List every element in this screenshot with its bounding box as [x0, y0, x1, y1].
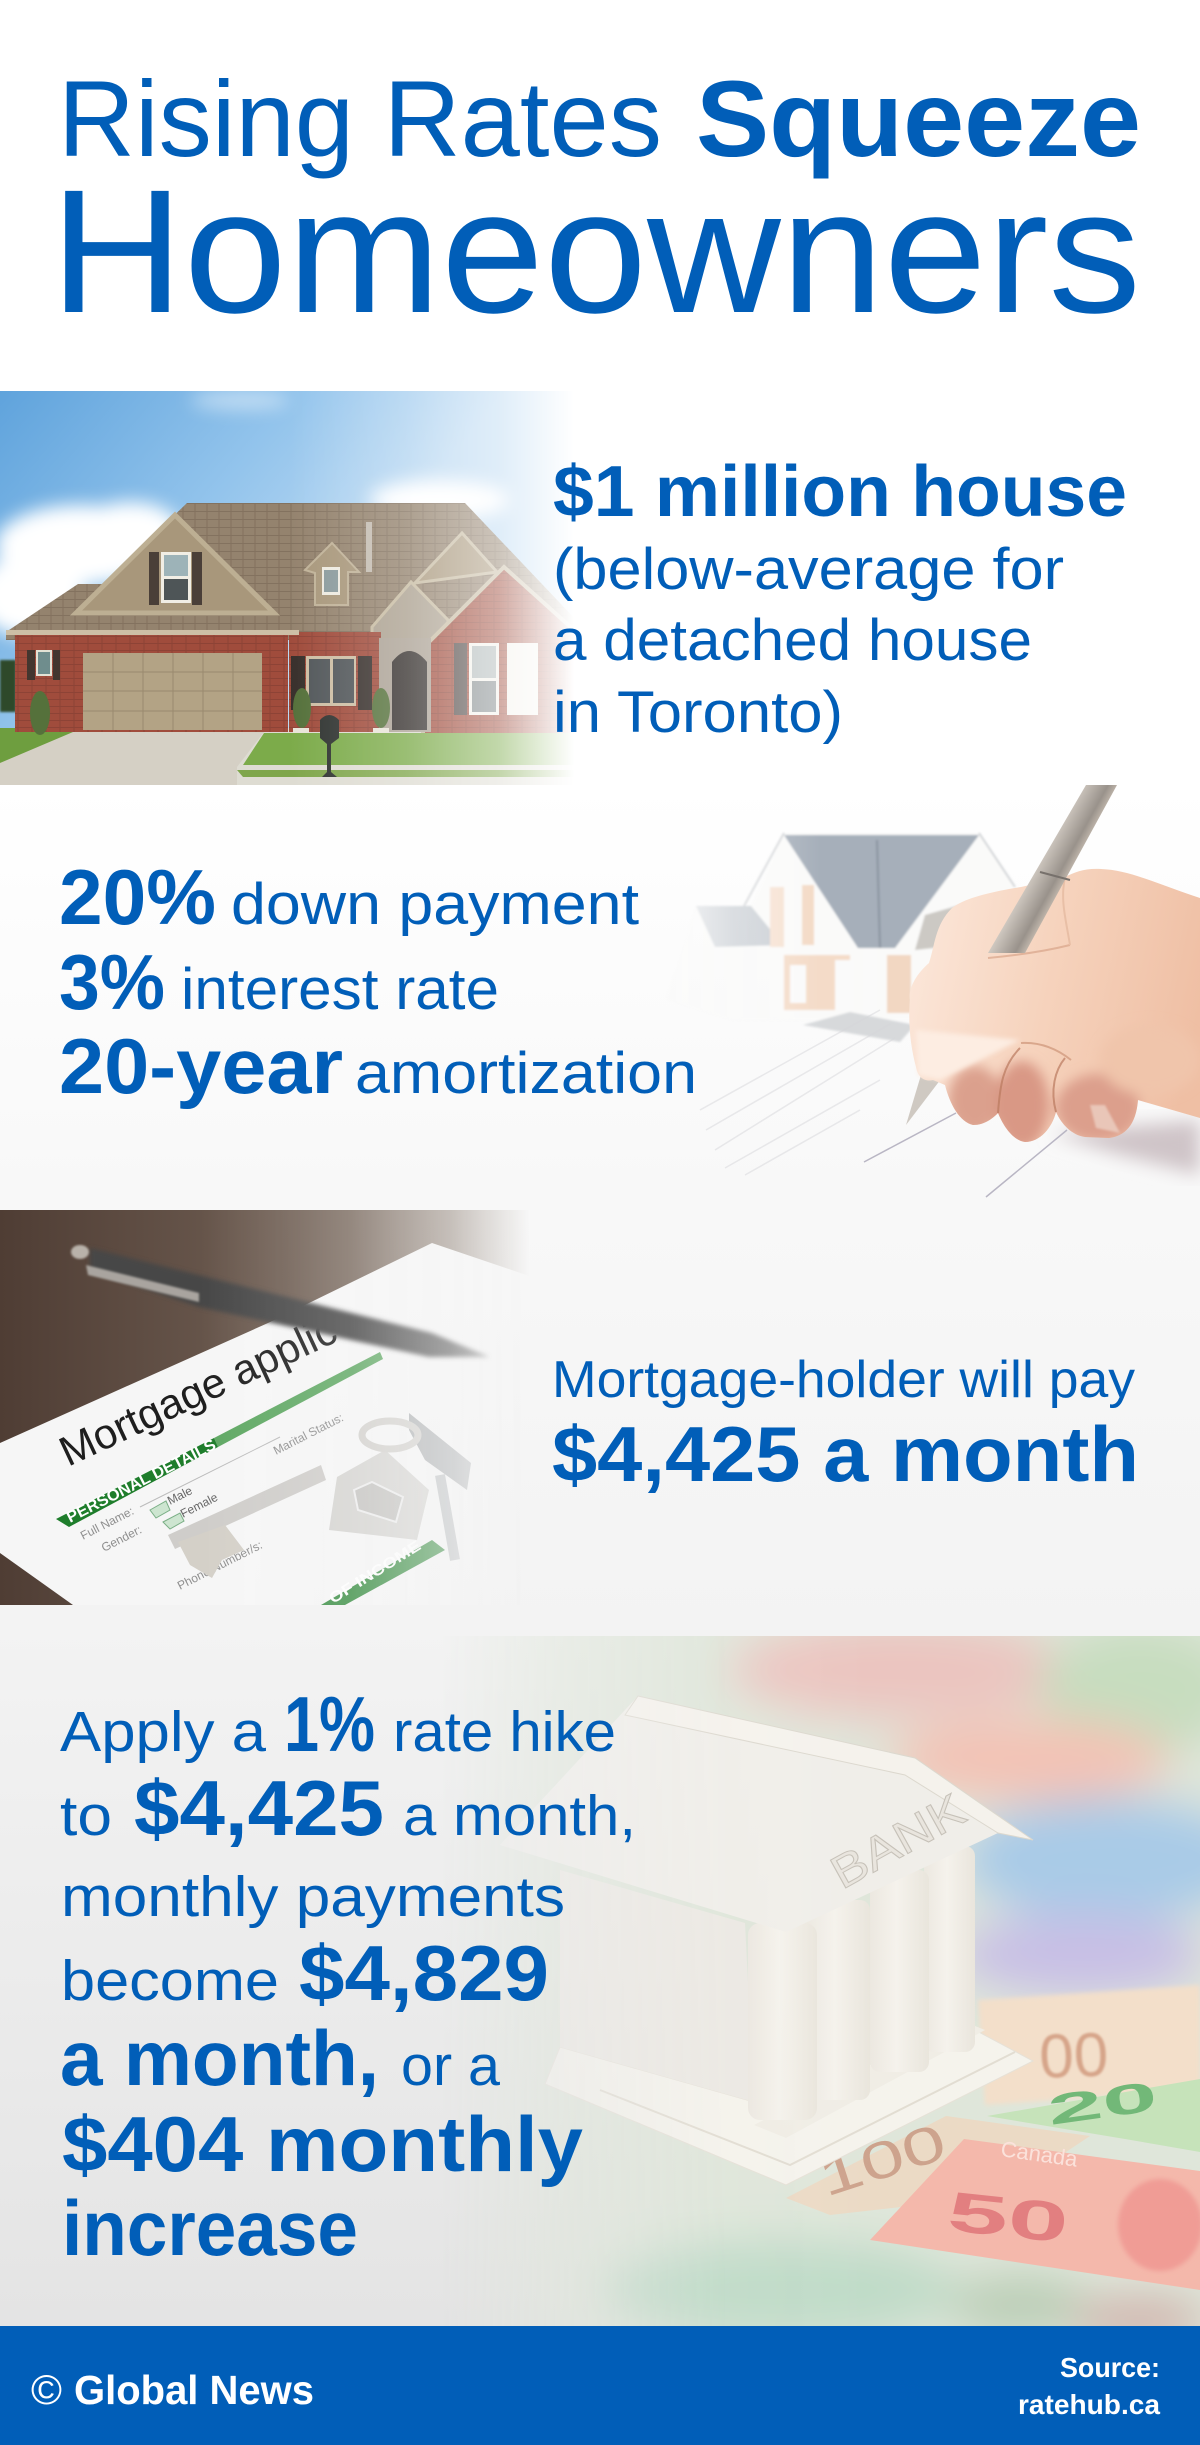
form labels: Female	[178, 1490, 220, 1521]
sidewalk lawn strip	[237, 770, 600, 777]
footer source: Source:	[1060, 2352, 1160, 2383]
right windows	[454, 643, 538, 715]
green $20 note	[987, 2072, 1200, 2152]
text block: monthly payment: Mortgage-holder will pay	[552, 1351, 1135, 1409]
center brick wall	[289, 632, 381, 732]
stone entry	[379, 638, 431, 732]
application form	[0, 1243, 518, 1605]
bank lettering: BANK	[822, 1783, 974, 1899]
paper lines	[700, 1010, 895, 1175]
garage door	[83, 653, 262, 730]
pink $50 note: 50	[945, 2179, 1072, 2255]
front window	[291, 656, 372, 710]
blurred banknotes	[300, 1560, 1200, 2410]
text block: house description	[553, 452, 1127, 745]
clouds	[0, 391, 510, 637]
text block: rate hike explanation: a month,	[60, 2014, 379, 2102]
panel: mortgage application photo	[0, 1210, 518, 1605]
house roof	[6, 503, 578, 640]
form labels: Male	[165, 1483, 195, 1508]
text block: rate hike explanation: Apply a	[60, 1700, 266, 1764]
bank columns	[748, 1846, 975, 2120]
fingernail	[1090, 1105, 1120, 1133]
panel: hand signing with model house	[665, 785, 1200, 1197]
title	[50, 58, 1141, 350]
text block: mortgage terms: amortization	[355, 1041, 697, 1106]
text block: rate hike explanation: $404 monthly	[62, 2100, 583, 2188]
fingers	[944, 880, 1143, 1142]
pen body	[988, 785, 1117, 953]
panel: bank model on Canadian banknotes	[524, 1636, 1200, 2326]
section bar: personal details: PERSONAL DETAILS	[64, 1436, 219, 1527]
pen tip	[906, 1075, 944, 1125]
green $20 note: 20	[1045, 2072, 1160, 2134]
section bar: proof of income: OF INCOME	[326, 1537, 424, 1607]
pink $50 note	[870, 2136, 1200, 2290]
form heading: Mortgage applic	[52, 1306, 344, 1475]
model house	[665, 833, 1015, 1042]
footer source: ratehub.ca	[1018, 2389, 1160, 2420]
text block: mortgage terms: 20-year	[59, 1022, 343, 1110]
text block: rate hike explanation: rate hike	[393, 1700, 616, 1764]
text block: mortgage terms	[59, 853, 697, 1110]
text block: mortgage terms: 20%	[59, 853, 216, 941]
finger creases	[988, 877, 1071, 1113]
text block: house description: $1 million house	[553, 452, 1127, 532]
text block: house description: in Toronto)	[553, 680, 843, 745]
front door	[392, 651, 427, 730]
roof vent	[366, 522, 372, 572]
text block: rate hike explanation	[60, 1680, 636, 2272]
bank base	[545, 2030, 1033, 2185]
footer source	[1018, 2352, 1160, 2420]
form green rule	[214, 1352, 383, 1447]
wood table	[0, 1210, 560, 1605]
small window	[27, 650, 60, 680]
footer credit: ©	[31, 2366, 62, 2413]
text block: house description: (below-average for	[553, 537, 1064, 602]
text block: rate hike explanation: $4,829	[299, 1929, 549, 2017]
hand shadow	[1050, 1120, 1200, 1175]
pen on table	[71, 1245, 490, 1357]
text block: rate hike explanation: become	[61, 1949, 279, 2013]
panel: house photo	[0, 391, 600, 785]
lower $100 note	[786, 2113, 1090, 2215]
tan $100 note: 00	[1038, 2021, 1109, 2092]
hand	[909, 869, 1200, 1149]
bank roof	[500, 1696, 998, 1932]
right gables	[372, 533, 585, 735]
shrubs	[30, 688, 390, 735]
footer band	[0, 2326, 1200, 2445]
thumb highlight	[916, 1030, 1020, 1080]
left gable	[76, 515, 274, 613]
text block: rate hike explanation: 1%	[284, 1680, 375, 1768]
title: Rising Rates	[58, 58, 662, 179]
driveway	[0, 732, 264, 785]
title: Squeeze	[696, 58, 1141, 179]
dormer	[305, 543, 359, 605]
text block: mortgage terms: 3%	[59, 938, 165, 1026]
text block: rate hike explanation: a month,	[403, 1784, 636, 1848]
left lawn	[0, 728, 73, 763]
house key	[168, 1413, 471, 1578]
text block: rate hike explanation: increase	[62, 2184, 358, 2272]
text block: rate hike explanation: monthly payments	[61, 1865, 565, 1929]
ground base	[237, 728, 536, 785]
form labels: Full Name:	[78, 1504, 136, 1543]
signature lines	[864, 1113, 1067, 1197]
lower $100 note: 100	[812, 2113, 953, 2208]
text block: monthly payment	[552, 1351, 1139, 1498]
section bar: proof of income	[321, 1537, 445, 1607]
pink $50 note: Canada	[999, 2136, 1080, 2172]
bank model	[500, 1696, 1033, 2185]
text block: rate hike explanation: $4,425	[134, 1764, 384, 1852]
bank wall	[560, 1870, 754, 2102]
garage wall	[15, 635, 288, 732]
form labels: Gender:	[99, 1523, 144, 1555]
text block: rate hike explanation: or a	[401, 2034, 500, 2098]
front lawn	[243, 733, 564, 765]
mailbox	[320, 715, 339, 777]
form labels: Marital Status:	[271, 1410, 346, 1458]
gable window	[149, 552, 202, 605]
footer credit: Global News	[74, 2367, 314, 2413]
text block: rate hike explanation: to	[60, 1784, 112, 1848]
form labels: Phone Number/s:	[175, 1538, 265, 1593]
title: Homeowners	[50, 154, 1141, 350]
text block: mortgage terms: interest rate	[181, 957, 499, 1022]
text block: monthly payment: $4,425 a month	[552, 1410, 1139, 1498]
form labels	[78, 1410, 346, 1593]
tan $100 note	[978, 1985, 1200, 2105]
text block: house description: a detached house	[553, 608, 1032, 673]
text block: mortgage terms: down payment	[231, 872, 639, 937]
distant trees	[0, 660, 16, 712]
